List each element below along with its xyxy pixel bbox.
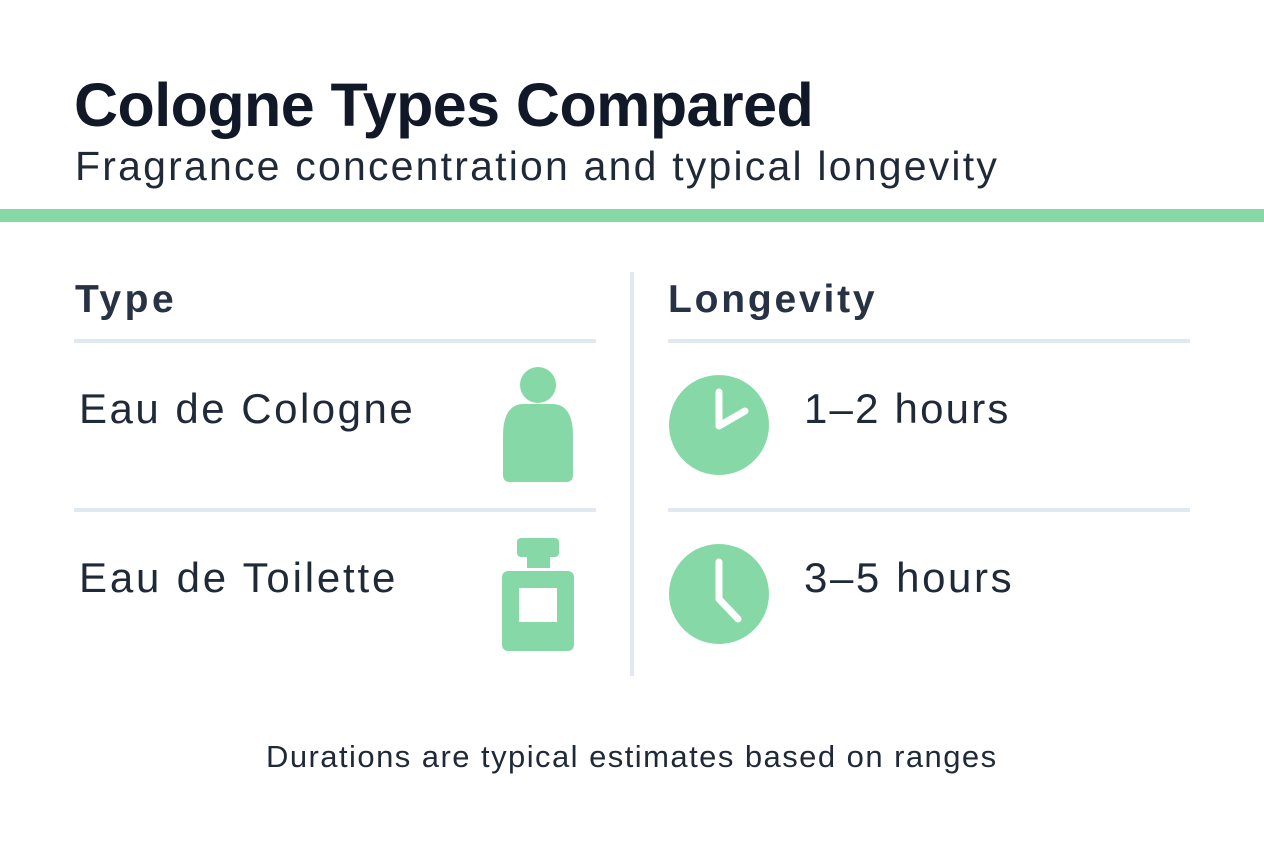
footnote: Durations are typical estimates based on ranges (266, 739, 998, 774)
subtitle: Fragrance concentration and typical longevity (75, 143, 999, 189)
icon: clock 1-2 hours (669, 375, 769, 475)
icon: round bottle (503, 367, 573, 482)
header accent bar (0, 209, 1264, 222)
value: 3-5 hours: 3–5 hours (804, 554, 1014, 601)
value: 1-2 hours: 1–2 hours (804, 385, 1011, 432)
title: Cologne Types Compared (74, 71, 813, 139)
icon: square bottle (502, 538, 574, 651)
icon: clock 3-5 hours (669, 544, 769, 644)
row: Eau de Toilette: Eau de Toilette (79, 554, 398, 601)
row: Eau de Cologne: Eau de Cologne (79, 385, 415, 432)
column header: Type: Type (75, 278, 177, 321)
column header: Longevity: Longevity (668, 278, 877, 321)
